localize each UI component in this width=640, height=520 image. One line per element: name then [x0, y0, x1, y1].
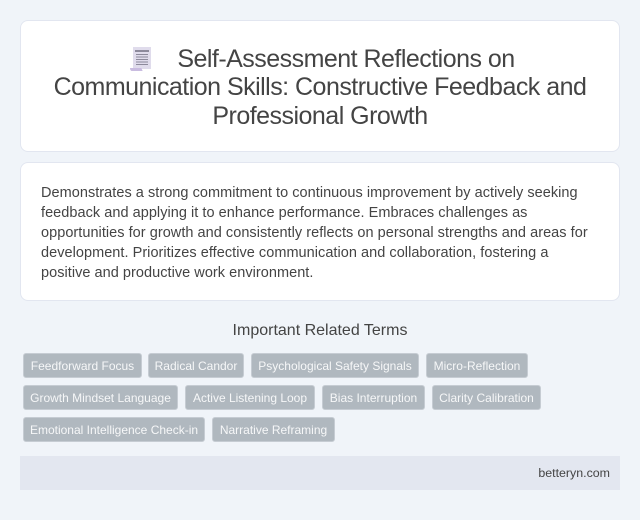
title line 3: Professional Growth [212, 102, 428, 130]
description text: development. Prioritizes effective communication and collaboration, fostering a [41, 244, 548, 260]
tag group: related terms: Bias Interruption [330, 391, 417, 405]
tag group: related terms: Clarity Calibration [439, 391, 534, 405]
panel: description card [20, 162, 620, 301]
footer source: betteryn.com [538, 466, 610, 480]
icon: receipt document [130, 47, 151, 71]
panel: title card [20, 20, 620, 152]
section heading: Important Related Terms [233, 322, 407, 339]
tag group: related terms: Feedforward Focus [31, 359, 134, 373]
description text: Demonstrates a strong commitment to continuous improvement by actively seeking [41, 184, 578, 200]
tag group: related terms: Emotional Intelligence Check-in [30, 423, 198, 437]
tag group: related terms [23, 353, 541, 442]
description text: feedback and applying it to enhance performance. Embraces challenges as [41, 204, 527, 220]
footer bar [20, 456, 620, 490]
tag group: related terms: Micro-Reflection [434, 359, 520, 373]
title line 2: Communication Skills: Constructive Feedback and [54, 73, 586, 101]
description text [41, 184, 588, 280]
description text: opportunities for growth and consistently reflects on personal strengths and areas for [41, 224, 588, 240]
tag group: related terms: Psychological Safety Signals [258, 359, 412, 373]
tag group: related terms: Narrative Reframing [220, 423, 327, 437]
tag group: related terms: Radical Candor [155, 359, 237, 373]
description text: positive and productive work environment. [41, 264, 313, 280]
tag group: related terms: Active Listening Loop [193, 391, 307, 405]
tag group: related terms: Growth Mindset Language [30, 391, 171, 405]
title line 1: Self-Assessment Reflections on [177, 45, 515, 73]
